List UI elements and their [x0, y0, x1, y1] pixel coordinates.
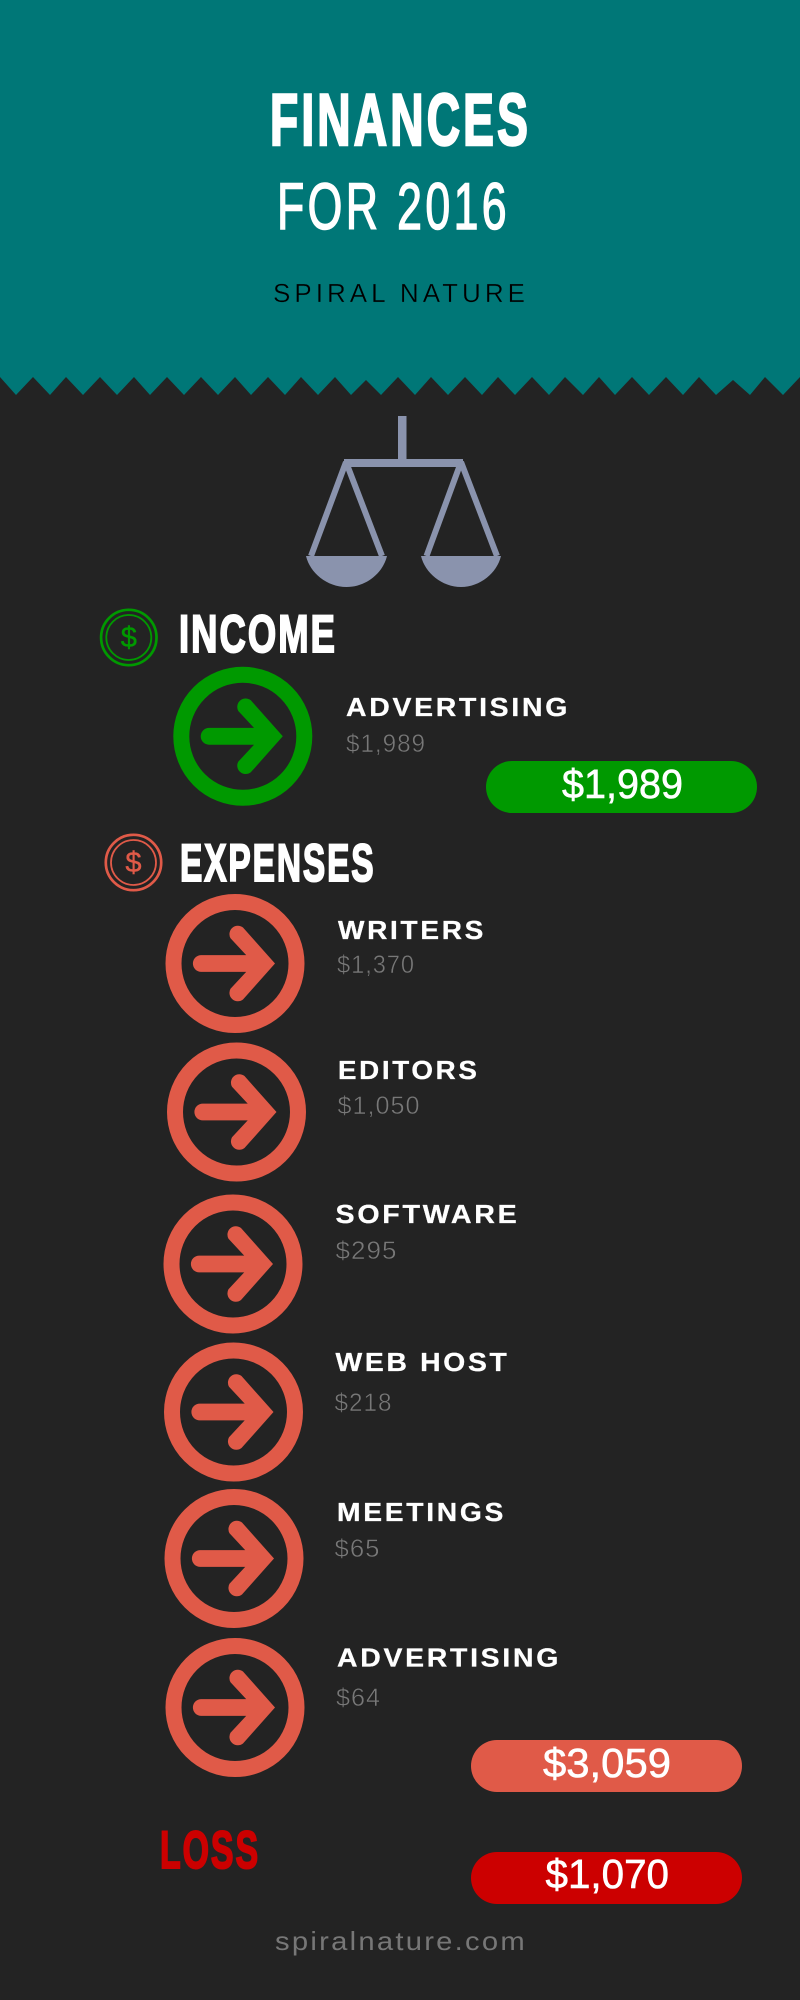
total pill: expenses: $3,059: [543, 1740, 671, 1786]
label: advertising expense: ADVERTISING: [337, 1642, 561, 1672]
icon: editors arrow circle: [175, 1050, 298, 1174]
label: web host: WEB HOST: [336, 1347, 510, 1377]
total pill: loss: $1,070: [546, 1851, 669, 1897]
label: writers: WRITERS: [338, 915, 486, 945]
label: advertising income: ADVERTISING: [346, 692, 570, 722]
total pill: expenses: [471, 1740, 742, 1792]
value: web host: $218: [334, 1389, 392, 1417]
icon: expenses coin: $: [125, 847, 142, 879]
label: software: SOFTWARE: [336, 1199, 520, 1229]
value: advertising expense: $64: [336, 1684, 381, 1712]
panel: teal header: [0, 0, 800, 395]
value: meetings: $65: [334, 1535, 380, 1563]
total pill: loss: [471, 1851, 742, 1904]
icon: income coin: $: [121, 622, 137, 654]
icon: green arrow circle: [181, 675, 304, 798]
title: finances: FINANCES: [270, 80, 531, 161]
heading: loss: LOSS: [160, 1821, 260, 1880]
panel: income: [101, 605, 757, 813]
value: writers: $1,370: [337, 951, 415, 979]
heading: expenses: EXPENSES: [180, 834, 376, 893]
icon: meetings arrow circle: [172, 1497, 296, 1620]
subtitle: spiral nature: SPIRAL NATURE: [273, 278, 525, 308]
icon: advertising expense arrow circle: [174, 1646, 296, 1769]
footer: website: spiralnature.com: [275, 1926, 527, 1956]
label: meetings: MEETINGS: [337, 1497, 506, 1527]
icon: software arrow circle: [172, 1202, 294, 1326]
icon: balance scale: [306, 416, 501, 587]
value: advertising income: $1,989: [346, 730, 426, 758]
icon: expenses coin: [106, 835, 161, 890]
title: for 2016: FOR 2016: [277, 169, 510, 243]
panel: expenses: [106, 834, 742, 1792]
icon: income coin: [101, 610, 156, 665]
total pill: income: [486, 761, 757, 813]
value: editors: $1,050: [338, 1092, 420, 1120]
icon: web host arrow circle: [172, 1350, 295, 1474]
total pill: income: $1,989: [562, 761, 683, 807]
label: editors: EDITORS: [338, 1055, 480, 1085]
icon: writers arrow circle: [174, 902, 296, 1025]
value: software: $295: [336, 1237, 398, 1265]
heading: income: INCOME: [179, 605, 337, 664]
